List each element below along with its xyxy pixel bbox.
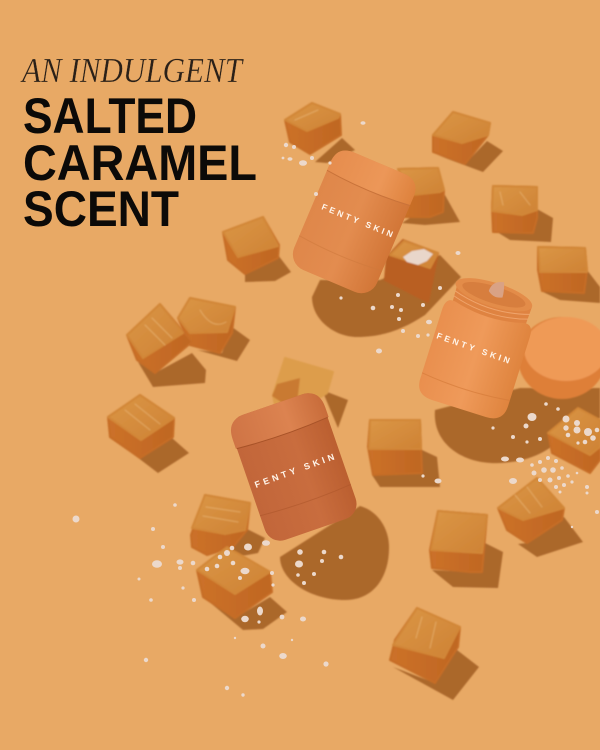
caramel 12: [368, 420, 440, 487]
cream: [488, 279, 507, 299]
caramel 16: [498, 478, 583, 557]
jar 3: [226, 389, 362, 545]
caramel 9: [178, 298, 250, 361]
label: jar 3: FENTY SKIN: [253, 452, 336, 490]
caramel 1: [285, 103, 355, 163]
caramel 6 with salt: [385, 240, 438, 302]
subheading: AN INDULGENT: [20, 51, 244, 90]
caramel 4: [223, 217, 291, 282]
salt crystals: [72, 121, 599, 697]
jar shadows: [280, 255, 600, 600]
caramel 17: [548, 408, 600, 473]
caramel 5: [398, 168, 460, 225]
caramel 13: [191, 495, 265, 560]
caramel 11: [108, 395, 189, 473]
caramel 10: [272, 358, 348, 428]
lid: [226, 389, 329, 451]
salt on caramel 6: [403, 249, 433, 265]
neck: [450, 283, 532, 332]
body: [415, 298, 533, 422]
caramel 3: [492, 186, 553, 242]
jar 1: [288, 146, 420, 298]
lid: [518, 317, 600, 399]
title: [20, 51, 257, 237]
caramel 8: [127, 304, 206, 387]
caramel 18: [390, 608, 479, 700]
jar 2: [415, 267, 543, 422]
caramel 14: [197, 547, 287, 630]
heading line 2: CARAMEL: [23, 135, 257, 191]
heading line 1: SALTED: [23, 88, 197, 144]
label: jar 2: FENTY SKIN: [435, 330, 511, 366]
caramel 7: [538, 247, 600, 303]
caramel 2: [433, 112, 503, 172]
heading line 3: SCENT: [23, 181, 179, 237]
lid: [326, 146, 420, 208]
label: jar 1: FENTY SKIN: [320, 202, 394, 239]
caramel 15: [430, 511, 503, 588]
